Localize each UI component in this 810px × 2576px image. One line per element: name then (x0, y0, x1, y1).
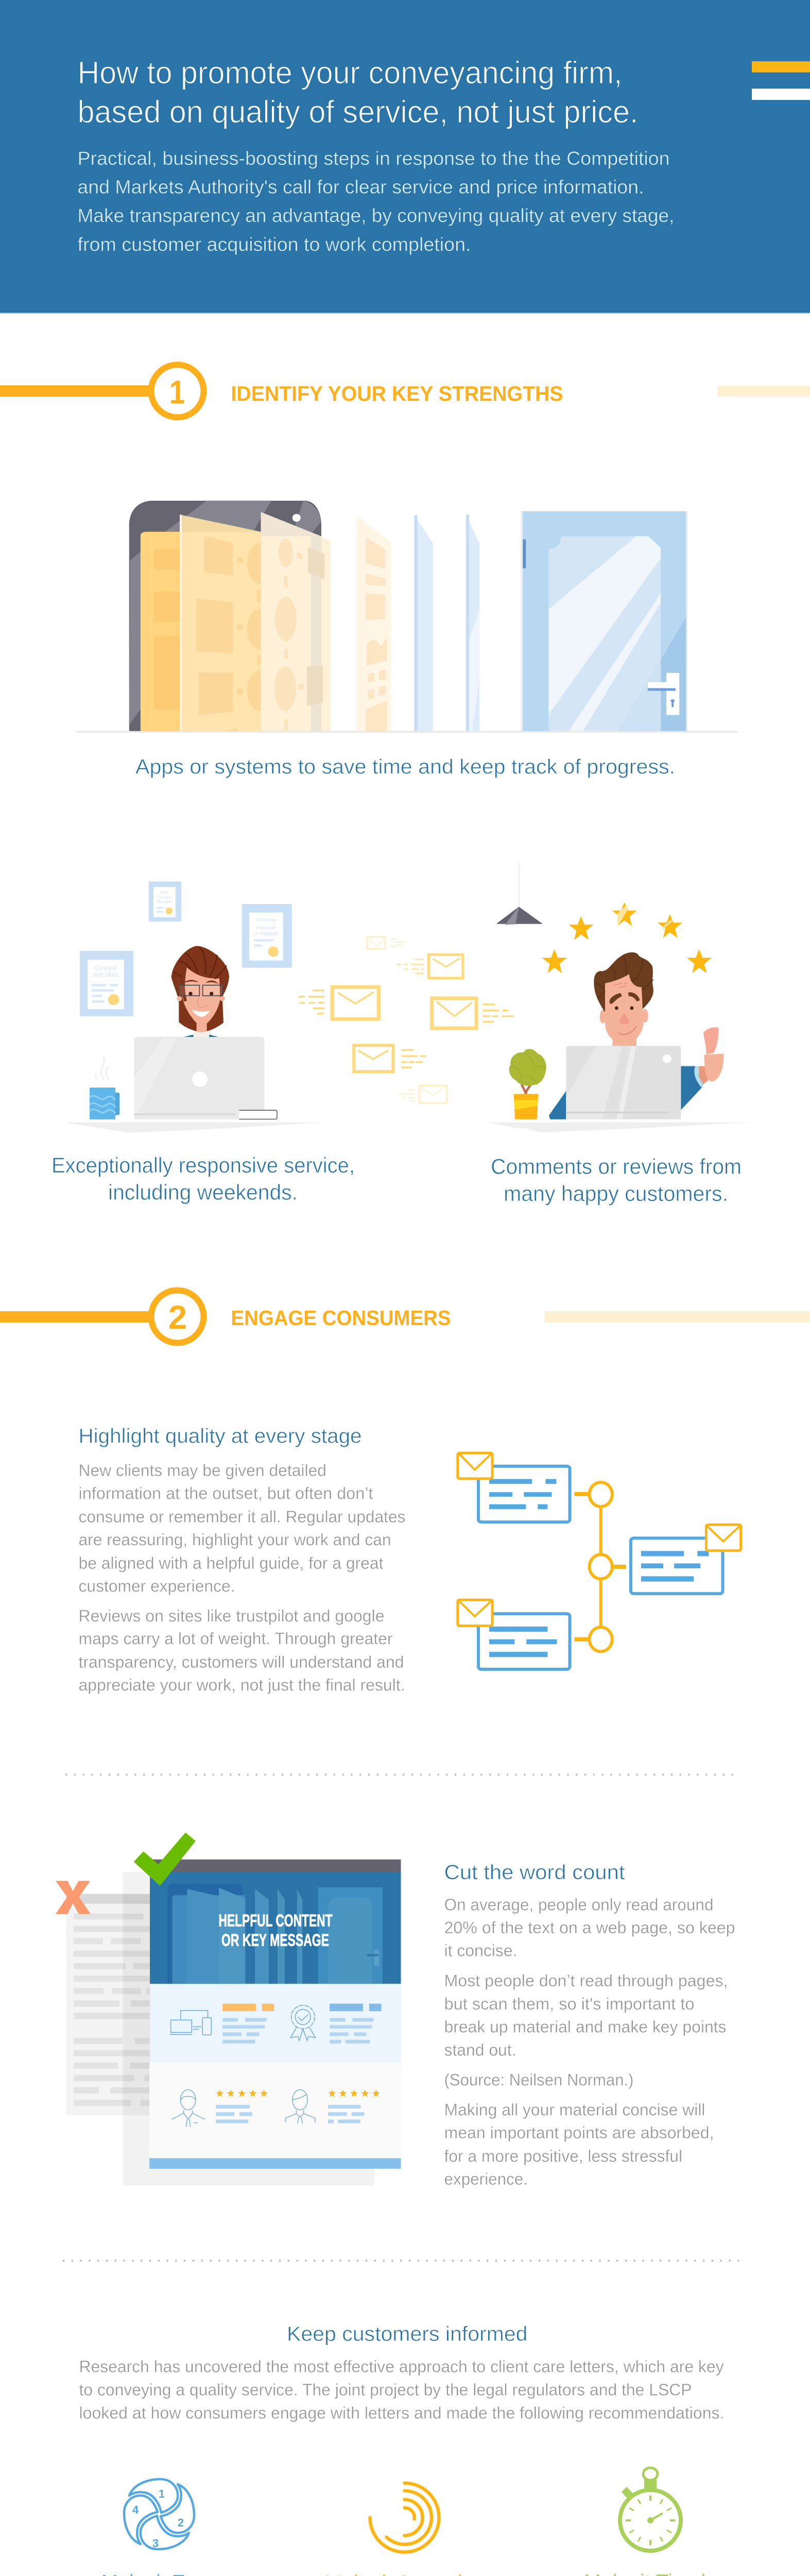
intro text: Practical, business-boosting steps in response to the the Competition (77, 148, 669, 169)
feature blocks (222, 2004, 382, 2043)
text block: highlight quality: consume or remember it all. Regular updates (78, 1507, 406, 1526)
arms and hand (549, 1027, 723, 1120)
text block: keep customers informed (79, 2323, 725, 2422)
envelope: pale top (367, 937, 406, 949)
certificate: council (149, 882, 181, 922)
icon: tick (134, 1833, 195, 1886)
hero message: HELPFUL CONTENT (218, 1911, 333, 1930)
panel: header (0, 0, 810, 314)
icon: rings make it attractive (370, 2483, 439, 2552)
text block: highlight quality (78, 1425, 406, 1694)
text block: cut the word count: 20% of the text on a web page, so keep (444, 1919, 735, 1937)
certificate: council: Jedi (160, 890, 168, 895)
title: How to promote your conveyancing firm, (77, 55, 622, 90)
icon: reviewer woman (285, 2090, 315, 2124)
text block: highlight quality: New clients may be given detailed (78, 1461, 326, 1480)
text block: highlight quality: be aligned with a helpful guide, for a great (78, 1554, 384, 1572)
certificate: council: Council (157, 895, 170, 900)
rating stars (216, 2090, 380, 2097)
update card 3 (458, 1600, 570, 1669)
envelope: centre right (432, 998, 513, 1028)
wordy document (66, 1894, 150, 2115)
review stars (542, 902, 712, 973)
envelope: large left (299, 987, 378, 1019)
text block: highlight quality: customer experience. (78, 1577, 235, 1595)
title: based on quality of service, not just price. (77, 94, 639, 129)
icon: swirl make it easy: 4 (132, 2503, 139, 2516)
certificate: jedi skills: Certified (94, 965, 116, 972)
flying envelopes (299, 937, 513, 1103)
certificate: university (242, 904, 292, 968)
text block: highlight quality: appreciate your work, not just the final result. (78, 1675, 405, 1694)
text block: highlight quality: maps carry a lot of weight. Through greater (78, 1629, 393, 1648)
section heading 2: 2 (168, 1299, 187, 1336)
intro text (77, 148, 675, 255)
text block: cut the word count: On average, people only read around (444, 1895, 714, 1914)
caption: responsive service (51, 1153, 355, 1205)
icon: swirl make it easy: 2 (178, 2516, 184, 2529)
title (77, 55, 639, 129)
layer C (356, 515, 391, 732)
text block: cut the word count: Cut the word count (444, 1861, 625, 1884)
certificate: university: Certificate (256, 918, 277, 923)
illustration: wordy page versus concise page (56, 1833, 401, 2185)
illustration: phone morphing into door (75, 501, 738, 733)
section heading 2: ENGAGE CONSUMERS (231, 1306, 451, 1330)
update card 1 (458, 1453, 570, 1522)
laptop (566, 1046, 681, 1120)
envelope: lower (354, 1045, 426, 1072)
text block: cut the word count: for a more positive, less stressful (444, 2147, 682, 2165)
text block: cut the word count: (Source: Neilsen Norman.) (444, 2071, 633, 2089)
text block: cut the word count: Most people don’t read through pages, (444, 1971, 728, 1990)
intro text: and Markets Authority's call for clear service and price information. (77, 176, 644, 198)
intro text: Make transparency an advantage, by conveying quality at every stage, (77, 205, 675, 226)
door (521, 511, 687, 732)
laptop (134, 1037, 264, 1120)
text block: cut the word count (444, 1861, 735, 2189)
icon: devices (170, 2010, 211, 2035)
layer B (261, 512, 331, 732)
update card 2 (631, 1524, 741, 1594)
diagram: timeline of updates (458, 1453, 741, 1669)
lamp (496, 862, 543, 925)
text block: cut the word count: experience. (444, 2170, 528, 2189)
mug (90, 1056, 119, 1120)
icon: stopwatch make it timely (620, 2468, 681, 2551)
layer D (415, 515, 433, 732)
certificate: jedi skills (80, 951, 133, 1016)
illustration: woman at laptop (67, 882, 324, 1132)
envelope: pale bottom (399, 1086, 447, 1103)
layer A (180, 515, 275, 732)
faded hero image (167, 1884, 383, 1984)
concise page (149, 1859, 401, 2169)
caption: reviews: Comments or reviews from (491, 1155, 742, 1179)
certificate: university: University (256, 925, 277, 930)
text block: keep customers informed: to conveying a quality service. The joint project by the legal regulators and the LSCP (79, 2380, 692, 2399)
section heading 1: IDENTIFY YOUR KEY STRENGTHS (231, 382, 563, 405)
icon: swirl make it easy (124, 2479, 194, 2550)
icon: reviewer man (171, 2090, 205, 2127)
caption: responsive service: Exceptionally responsive service, (51, 1153, 355, 1177)
certificate: university: of Dagobah (254, 931, 279, 936)
text block: cut the word count: but scan them, so it's important to (444, 1995, 694, 2013)
section heading 2 (0, 1290, 810, 1343)
text block: highlight quality: Highlight quality at every stage (78, 1425, 361, 1448)
man (594, 952, 653, 1047)
certificate: council: Member (157, 900, 172, 904)
text block: cut the word count: stand out. (444, 2041, 516, 2059)
phone (129, 501, 321, 732)
hero message (218, 1911, 333, 1950)
icon: award (290, 2005, 315, 2041)
text block: keep customers informed: Keep customers informed (287, 2323, 527, 2345)
section heading 1 (0, 365, 810, 417)
caption: responsive service: including weekends. (108, 1180, 298, 1205)
text block: keep customers informed: Research has uncovered the most effective approach to client care letters, which are key (79, 2358, 724, 2376)
text block: highlight quality: information at the outset, but often don’t (78, 1484, 373, 1503)
plant (509, 1049, 546, 1120)
decorative header bars (752, 61, 810, 100)
section heading 1: 1 (169, 374, 185, 411)
icon: cross (56, 1881, 91, 1914)
text block: keep customers informed: looked at how consumers engage with letters and made the following recommendations. (79, 2404, 725, 2422)
hero message: OR KEY MESSAGE (221, 1930, 329, 1950)
caption: reviews (491, 1155, 742, 1206)
icon: swirl make it easy: 3 (152, 2537, 159, 2550)
book (239, 1110, 277, 1119)
desk shadow (67, 1122, 324, 1132)
illustration: man with reviews (488, 862, 752, 1132)
text block: cut the word count: Making all your material concise will (444, 2100, 705, 2119)
caption: apps: Apps or systems to save time and keep track of progress. (135, 755, 675, 778)
text block: cut the word count: it concise. (444, 1941, 517, 1960)
intro text: from customer acquisition to work completion. (77, 234, 471, 255)
envelope: upper right (397, 955, 463, 978)
desk shadow (488, 1122, 752, 1132)
text block: highlight quality: transparency, customers will understand and (78, 1653, 404, 1671)
review lines (216, 2105, 364, 2123)
woman (171, 946, 229, 1037)
text block: cut the word count: break up material and make key points (444, 2018, 726, 2036)
layer E (466, 515, 479, 732)
text block: cut the word count: mean important points are absorbed, (444, 2124, 714, 2142)
certificate: jedi skills: Jedi Skills (92, 972, 119, 979)
icon: swirl make it easy: 1 (159, 2487, 165, 2500)
text block: highlight quality: Reviews on sites like trustpilot and google (78, 1606, 384, 1625)
caption: reviews: many happy customers. (504, 1181, 728, 1206)
timeline connectors (575, 1482, 626, 1652)
text block: highlight quality: are reassuring, highlight your work and can (78, 1530, 391, 1549)
